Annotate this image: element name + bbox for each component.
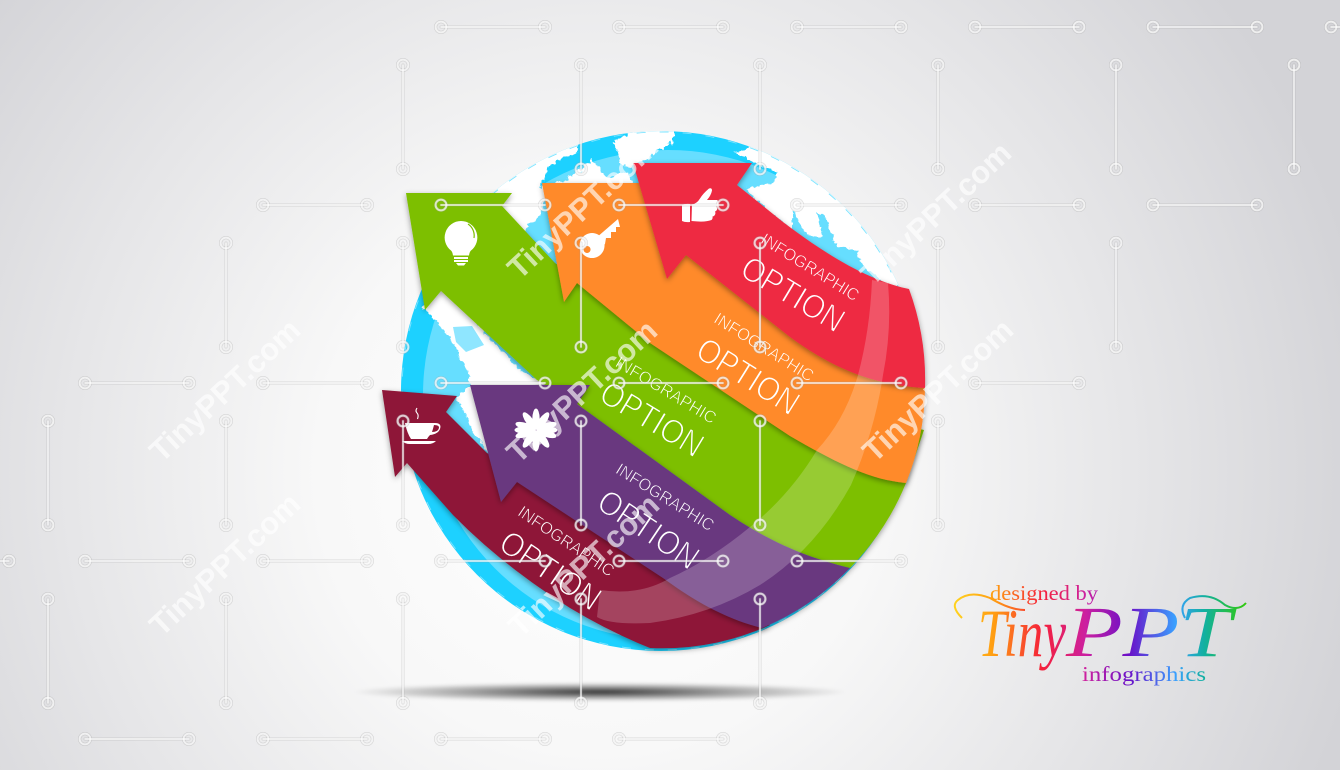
arrow: green [406, 193, 924, 568]
globe ocean [401, 131, 921, 651]
arrow: maroon [382, 390, 770, 648]
arrow: red [633, 163, 925, 388]
icon: coffee cup [402, 408, 440, 444]
watermarks: TinyPPT.com [501, 129, 665, 286]
key blade [596, 219, 620, 250]
icon: thumbs up [682, 188, 718, 222]
logo swash [955, 594, 1246, 618]
logo text: infographics: infographics [1082, 662, 1206, 686]
label: green option: INFOGRAPHIC [612, 353, 720, 428]
icon: light bulb [445, 221, 477, 266]
watermarks: TinyPPT.com [500, 313, 664, 470]
label: maroon option: INFOGRAPHIC [514, 502, 618, 581]
watermarks: TinyPPT.com [143, 312, 307, 469]
label: red option: INFOGRAPHIC [757, 230, 862, 305]
logo: designed by TinyPPT infographics [955, 581, 1246, 686]
label: green option: OPTION [593, 374, 710, 465]
globe lighter ring [423, 150, 913, 640]
globe highlight band [597, 280, 889, 623]
logo text: designed by: designed by [990, 581, 1099, 605]
icon: flower [514, 408, 558, 452]
label: purple option: INFOGRAPHIC [612, 460, 717, 535]
ground shadow [352, 682, 848, 702]
watermarks: TinyPPT.com [856, 312, 1020, 469]
watermarks: TinyPPT.com [502, 487, 666, 644]
key head [580, 233, 605, 258]
watermarks: TinyPPT.com [143, 486, 307, 643]
watermarks [143, 129, 1020, 644]
label: orange option: INFOGRAPHIC [711, 309, 817, 386]
label: red option: OPTION [734, 249, 851, 340]
label: maroon option: OPTION [492, 523, 608, 619]
label: purple option: OPTION [590, 482, 706, 578]
arrow: orange [542, 183, 925, 483]
label: orange option: OPTION [689, 330, 806, 423]
arrow: purple [470, 385, 850, 628]
logo text: PPT: PPT [1065, 592, 1237, 672]
icon: key [580, 219, 620, 258]
logo text: Tiny: Tiny [978, 595, 1067, 671]
globe [401, 122, 935, 651]
continents [402, 122, 935, 650]
watermarks: TinyPPT.com [854, 135, 1018, 292]
